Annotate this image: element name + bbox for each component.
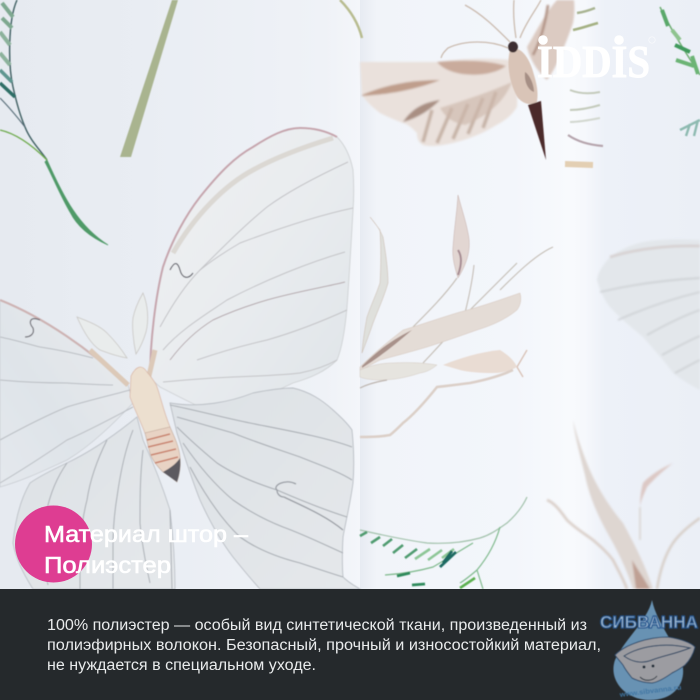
upright leaf <box>362 217 388 353</box>
pink circle accent <box>15 506 92 582</box>
upper right wing veins <box>160 138 353 382</box>
abdomen <box>145 427 180 482</box>
smiling bath <box>615 637 695 683</box>
lower leaf <box>360 363 437 380</box>
illustration: moth body and antennae <box>441 0 546 160</box>
illustration: moth <box>360 0 574 146</box>
illustration: green grass stems, left <box>0 0 362 245</box>
upper left wing veins <box>0 337 133 483</box>
iddis logo: IDDIS <box>537 36 650 87</box>
illustration: moth side leaves <box>565 8 603 165</box>
lower left wing veins <box>43 430 172 589</box>
lower right wing <box>170 388 360 589</box>
thorax and head <box>130 367 170 433</box>
illustration: partial wing on the right <box>597 239 700 390</box>
upper left wing <box>0 300 133 487</box>
right leaf <box>443 350 517 373</box>
lower right wing veins <box>170 405 352 577</box>
watermark logo: Sibvanna <box>600 600 698 700</box>
trailing leaf <box>360 370 513 437</box>
stems <box>413 247 553 363</box>
illustration: lower right grasses <box>547 420 700 589</box>
heading: Материал штор – <box>44 521 248 547</box>
brand name: СИБВАННА <box>600 612 698 632</box>
body text: 100% полиэстер — особый вид синтетической ткани, произведенный из <box>47 617 587 634</box>
forelegs <box>90 350 155 385</box>
dark text band <box>0 589 700 700</box>
illustration: lower centre green sprig <box>360 497 527 589</box>
url: www.sibvanna.ru <box>618 684 682 699</box>
forewing leading edges <box>150 128 337 380</box>
illustration: large butterfly <box>0 128 360 589</box>
small inner petals <box>133 293 148 354</box>
lower left wing <box>13 417 175 589</box>
illustration: central dried plant <box>360 195 553 437</box>
main leaf <box>360 293 521 370</box>
illustration: green sprig top right <box>660 7 700 136</box>
upper right wing <box>150 128 354 407</box>
heading: Полиэстер <box>44 552 171 578</box>
body text: полиэфирных волокон. Безопасный, прочный и износостойкий материал, <box>47 637 601 654</box>
top leaf <box>453 195 469 278</box>
wing spot marks <box>170 264 193 277</box>
body text: не нуждается в специальном уходе. <box>47 657 316 674</box>
water drop <box>613 600 683 700</box>
